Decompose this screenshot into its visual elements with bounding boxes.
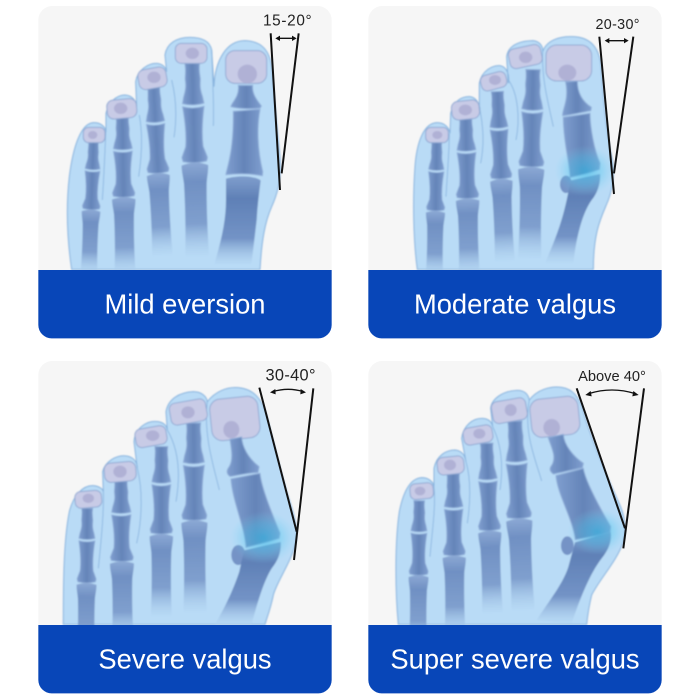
label band: Mild eversion (38, 270, 332, 338)
inflammation glow (567, 508, 627, 555)
angle indicator: 20-30 degrees: 20-30° (595, 17, 640, 33)
foot illustration: moderate (414, 37, 616, 277)
panel: moderate valgus (368, 6, 662, 338)
label band: Mild eversion: Mild eversion (104, 288, 265, 319)
inflammation glow (554, 145, 616, 196)
label band: Super severe valgus: Super severe valgus (390, 643, 640, 674)
angle indicator: 30-40 degrees (259, 366, 316, 560)
label band: Severe valgus: Severe valgus (98, 643, 272, 674)
angle indicator: 20-30 degrees (595, 17, 640, 194)
angle indicator: above 40 degrees (577, 369, 646, 548)
label band: Moderate valgus: Moderate valgus (414, 288, 616, 319)
foot illustration: mild (67, 37, 281, 275)
label band: Super severe valgus (368, 625, 662, 693)
panel: super severe valgus (368, 361, 662, 693)
foot illustration: super severe (396, 387, 627, 646)
panel: mild eversion (38, 6, 332, 338)
foot illustration: severe (63, 388, 297, 653)
inflammation glow (230, 511, 297, 564)
panel: severe valgus (38, 361, 332, 693)
angle indicator: 15-20 degrees: 15-20° (263, 12, 312, 29)
label band: Moderate valgus (368, 270, 662, 338)
angle indicator: 15-20 degrees (263, 12, 312, 190)
angle indicator: 30-40 degrees: 30-40° (266, 366, 316, 384)
angle indicator: above 40 degrees: Above 40° (578, 369, 646, 385)
label band: Severe valgus (38, 625, 332, 693)
